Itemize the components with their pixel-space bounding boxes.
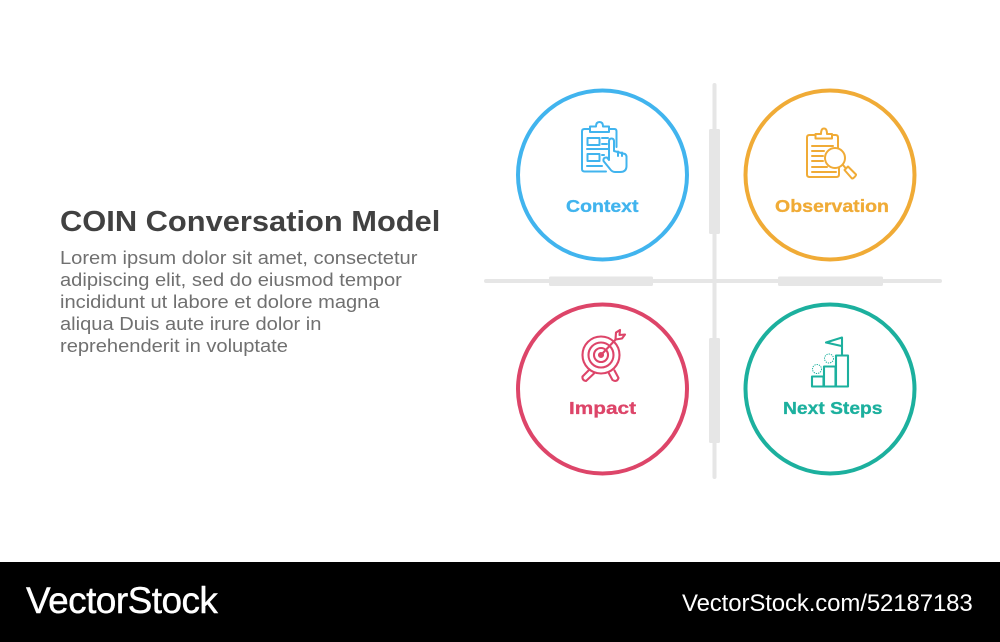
- label: observation: Observation: [775, 196, 889, 216]
- description text: [60, 248, 418, 356]
- label: context: Context: [566, 196, 639, 216]
- label: next steps: Next Steps: [783, 398, 883, 418]
- icon: clipboard with magnifier: [807, 128, 856, 178]
- title: COIN Conversation Model: [60, 206, 440, 238]
- description text: reprehenderit in voluptate: [60, 336, 288, 356]
- description text: aliqua Duis aute irure dolor in: [60, 314, 321, 334]
- panel: observation circle: [746, 90, 914, 260]
- watermark bar: [0, 562, 1000, 642]
- icon: clipboard with hand: [582, 122, 626, 172]
- panel: next steps circle: [746, 304, 914, 474]
- brand name: VectorStock: [26, 580, 217, 621]
- icon: steps with flag: [812, 338, 848, 386]
- label: impact: Impact: [569, 398, 636, 418]
- cross dividers: [484, 83, 942, 479]
- description text: incididunt ut labore et dolore magna: [60, 292, 380, 312]
- description text: Lorem ipsum dolor sit amet, consectetur: [60, 248, 417, 268]
- panel: impact circle: [518, 304, 687, 474]
- description text: adipiscing elit, sed do eiusmod tempor: [60, 270, 402, 290]
- icon: target with arrow: [582, 330, 625, 381]
- panel: context circle: [518, 90, 687, 260]
- image reference url: VectorStock.com/52187183: [682, 590, 973, 617]
